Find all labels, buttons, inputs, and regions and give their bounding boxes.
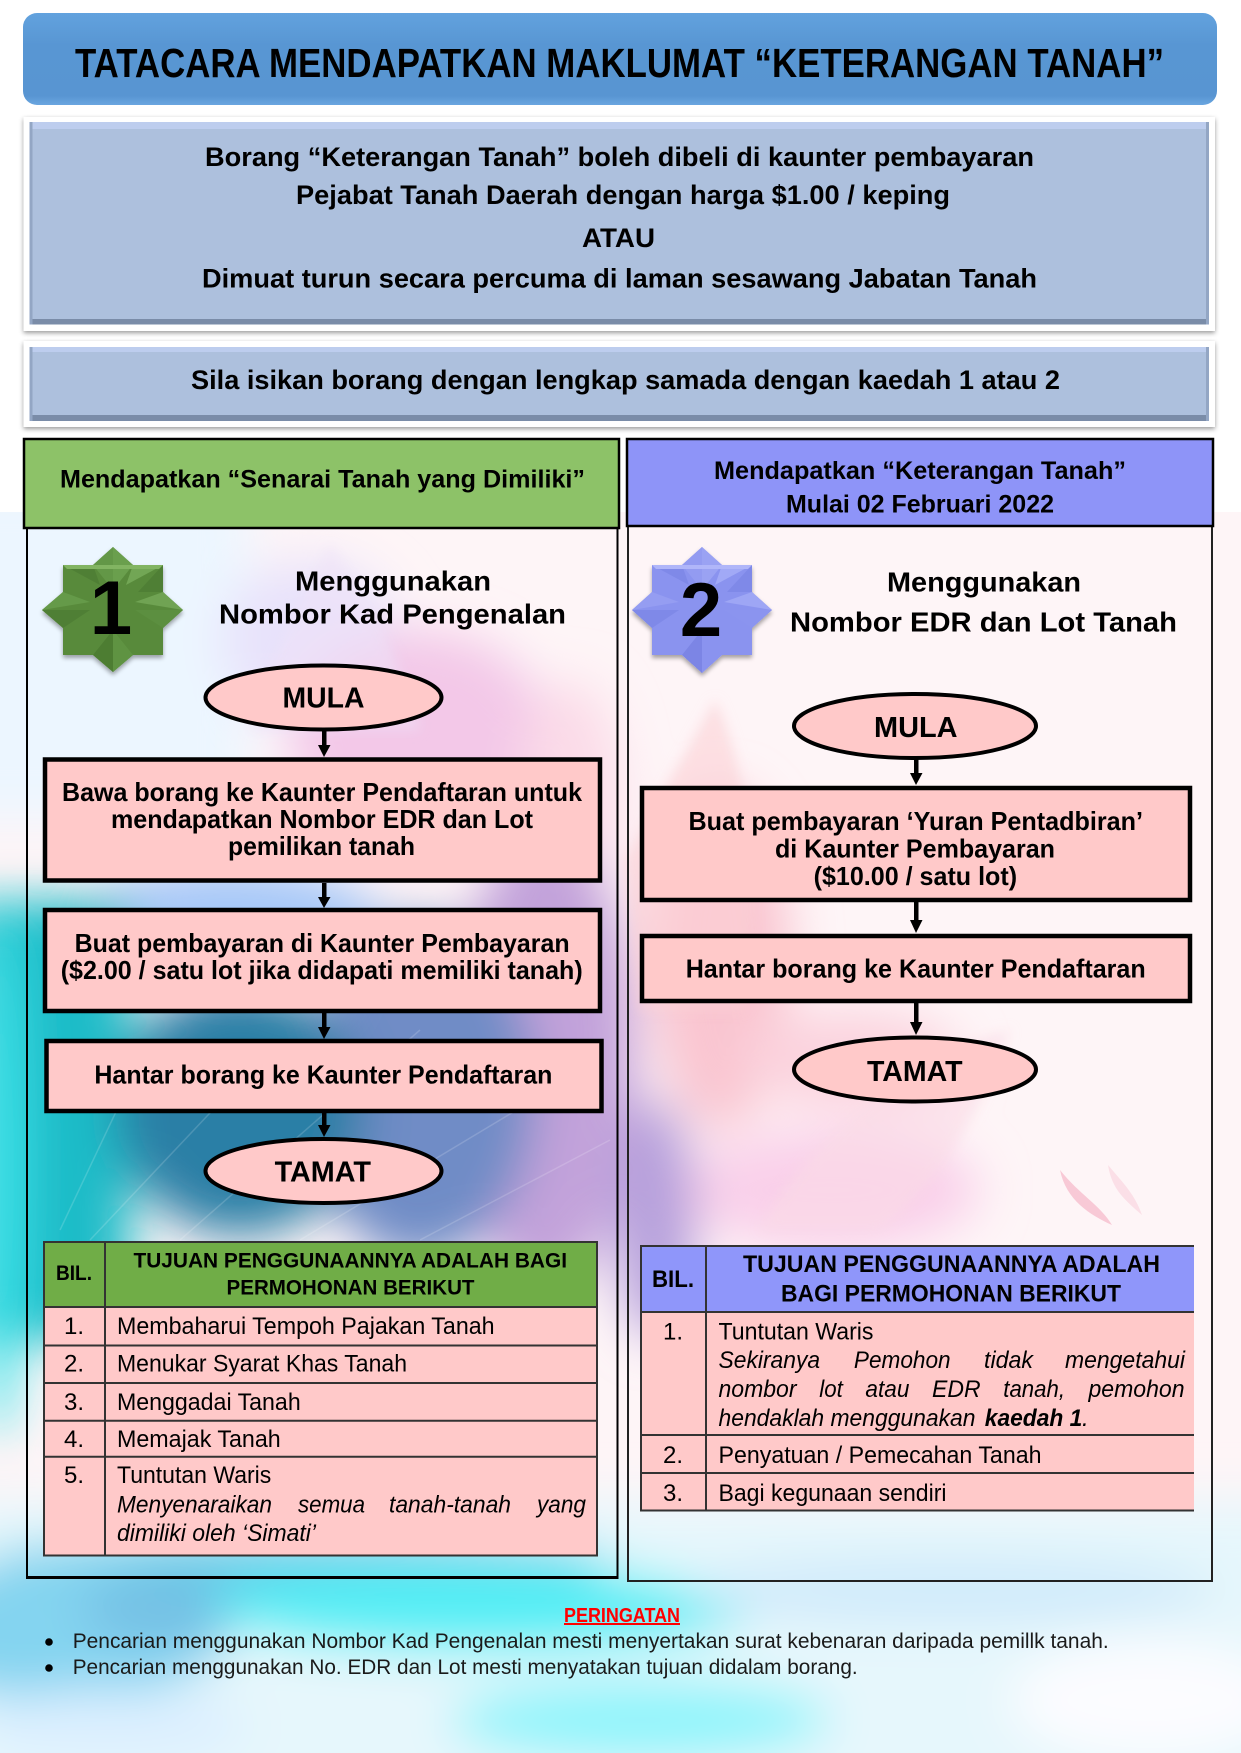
table: purposes for method 2: kaedah 1	[985, 1405, 1082, 1432]
background artwork	[0, 480, 1241, 1753]
table: purposes for method 1: yang	[535, 1492, 587, 1519]
flow step: take form to registration counter	[45, 760, 600, 880]
flow end: TAMAT	[275, 1157, 371, 1189]
panel: purchase information	[24, 117, 1215, 331]
table: purposes for method 2	[640, 1246, 1194, 1510]
table: purposes for method 2: Penyatuan / Pemecahan Tanah	[718, 1442, 1042, 1469]
flow start: MULA	[874, 712, 958, 744]
table: purposes for method 2: BAGI PERMOHONAN BERIKUT	[781, 1280, 1121, 1308]
flow step: take form to registration counter: Bawa borang ke Kaunter Pendaftaran untuk	[62, 777, 583, 807]
table: purposes for method 2: lot	[819, 1376, 844, 1403]
heading: using identity card number	[219, 566, 566, 630]
arrow	[318, 883, 330, 908]
flow step: take form to registration counter: pemilikan tanah	[228, 831, 415, 861]
icon: star badge 1: 1	[90, 566, 132, 651]
table: purposes for method 2: mengetahui	[1065, 1347, 1186, 1374]
table: purposes for method 1: semua	[298, 1492, 365, 1519]
panel: purchase information: Pejabat Tanah Daerah dengan harga $1.00 / keping	[296, 180, 950, 210]
arrow	[910, 902, 922, 933]
panel: purchase information: Borang “Keterangan Tanah” boleh dibeli di kaunter pembayaran	[205, 142, 1034, 172]
table: purposes for method 2: nombor	[718, 1376, 797, 1403]
warning notes: Pencarian menggunakan No. EDR dan Lot mesti menyatakan tujuan didalam borang.	[73, 1656, 858, 1679]
table: purposes for method 2: TUJUAN PENGGUNAANNYA ADALAH	[743, 1251, 1160, 1278]
table: purposes for method 1: TUJUAN PENGGUNAANNYA ADALAH BAGI	[134, 1250, 567, 1273]
table: purposes for method 1: tanah-tanah	[389, 1492, 511, 1519]
flow step: administration fee payment	[642, 788, 1190, 900]
flow step: payment: Buat pembayaran di Kaunter Pembayaran	[75, 928, 570, 958]
table: purposes for method 1: Membaharui Tempoh Pajakan Tanah	[117, 1313, 495, 1340]
arrow	[318, 730, 330, 757]
heading: method 1: Mendapatkan “Senarai Tanah yang Dimiliki”	[60, 466, 585, 494]
flow step: submit form: Hantar borang ke Kaunter Pendaftaran	[94, 1059, 552, 1089]
table: purposes for method 2: Bagi kegunaan sendiri	[718, 1480, 946, 1507]
table: purposes for method 1: PERMOHONAN BERIKUT	[226, 1277, 475, 1300]
table: purposes for method 2: tidak	[984, 1347, 1035, 1374]
panel: purchase information: Dimuat turun secara percuma di laman sesawang Jabatan Tanah	[202, 264, 1037, 294]
table: purposes for method 2: 2.	[663, 1442, 683, 1469]
table: purposes for method 2: Tuntutan Waris	[718, 1319, 874, 1346]
icon: star badge 2	[632, 547, 772, 673]
table: purposes for method 2: atau	[865, 1376, 909, 1403]
table: purposes for method 1: Menukar Syarat Khas Tanah	[117, 1351, 407, 1378]
table: purposes for method 2: hendaklah menggunakan	[718, 1405, 976, 1432]
flow step: submit form: Hantar borang ke Kaunter Pendaftaran	[686, 954, 1146, 984]
table: purposes for method 2: Pemohon	[854, 1347, 951, 1374]
flow start	[206, 666, 442, 730]
flow step: administration fee payment: ($10.00 / satu lot)	[814, 861, 1017, 891]
table: purposes for method 1: 2.	[64, 1351, 84, 1378]
table: purposes for method 1	[44, 1242, 597, 1556]
table: purposes for method 1: dimiliki oleh ‘Simati’	[117, 1520, 317, 1547]
heading: method 2: Mulai 02 Februari 2022	[786, 490, 1054, 518]
table: purposes for method 2: tanah,	[1003, 1376, 1065, 1403]
warning notes: PERINGATAN	[564, 1605, 680, 1627]
heading: method 1	[24, 439, 619, 528]
table: purposes for method 1: 4.	[64, 1426, 84, 1453]
flow start	[794, 694, 1036, 758]
heading: using EDR and lot number: Nombor EDR dan Lot Tanah	[790, 607, 1177, 638]
arrow	[910, 759, 922, 785]
flow step: take form to registration counter: mendapatkan Nombor EDR dan Lot	[111, 804, 533, 834]
table: purposes for method 2: Sekiranya	[718, 1347, 820, 1374]
flow end	[794, 1038, 1036, 1102]
table: purposes for method 1: 1.	[64, 1313, 84, 1340]
heading: using identity card number: Nombor Kad Pengenalan	[219, 598, 566, 630]
table: purposes for method 2: .	[1082, 1405, 1089, 1432]
arrow	[318, 1013, 330, 1039]
table: purposes for method 2: EDR	[932, 1376, 981, 1403]
table: purposes for method 1: Tuntutan Waris	[117, 1462, 271, 1489]
flow step: submit form	[642, 936, 1190, 1001]
flow start: MULA	[282, 682, 365, 714]
table: purposes for method 1: Menyenaraikan	[117, 1492, 272, 1519]
flow end	[206, 1139, 442, 1203]
table: purposes for method 2: pemohon	[1088, 1376, 1184, 1403]
heading: method 2	[627, 439, 1213, 526]
panel: purchase information: ATAU	[582, 223, 655, 253]
icon: star badge 1	[42, 547, 183, 672]
heading: using EDR and lot number: Menggunakan	[887, 566, 1081, 597]
heading: using EDR and lot number	[790, 566, 1177, 638]
table: purposes for method 1: 5.	[64, 1462, 84, 1489]
panel: method 1	[24, 439, 619, 1579]
table: purposes for method 2: 3.	[663, 1480, 683, 1507]
table: purposes for method 1: 3.	[64, 1389, 84, 1416]
arrow	[910, 1003, 922, 1035]
icon: star badge 2: 2	[680, 568, 722, 653]
heading: method 2: Mendapatkan “Keterangan Tanah”	[714, 457, 1126, 485]
panel: fill-in instruction	[24, 341, 1215, 427]
flow end: TAMAT	[867, 1056, 963, 1088]
title banner	[23, 13, 1217, 105]
table: purposes for method 1: BIL.	[56, 1262, 92, 1285]
heading: using identity card number: Menggunakan	[295, 566, 491, 596]
panel: fill-in instruction: Sila isikan borang dengan lengkap samada dengan kaedah 1 atau 2	[191, 365, 1060, 395]
flow step: administration fee payment: di Kaunter Pembayaran	[775, 834, 1055, 864]
warning notes: Pencarian menggunakan Nombor Kad Pengenalan mesti menyertakan surat kebenaran daripada pemillk tanah.	[73, 1630, 1109, 1653]
table: purposes for method 2: 1.	[663, 1319, 683, 1346]
table: purposes for method 1: Memajak Tanah	[117, 1426, 281, 1453]
warning notes	[45, 1605, 1109, 1679]
flow step: submit form	[46, 1041, 602, 1111]
table: purposes for method 2: BIL.	[652, 1266, 694, 1293]
arrow	[318, 1113, 330, 1137]
flow step: payment	[45, 910, 600, 1011]
table: purposes for method 1: Menggadai Tanah	[117, 1389, 301, 1416]
panel: method 2	[627, 439, 1213, 1581]
flow step: payment: ($2.00 / satu lot jika didapati memiliki tanah)	[61, 955, 583, 985]
flow step: administration fee payment: Buat pembayaran ‘Yuran Pentadbiran’	[688, 806, 1143, 836]
